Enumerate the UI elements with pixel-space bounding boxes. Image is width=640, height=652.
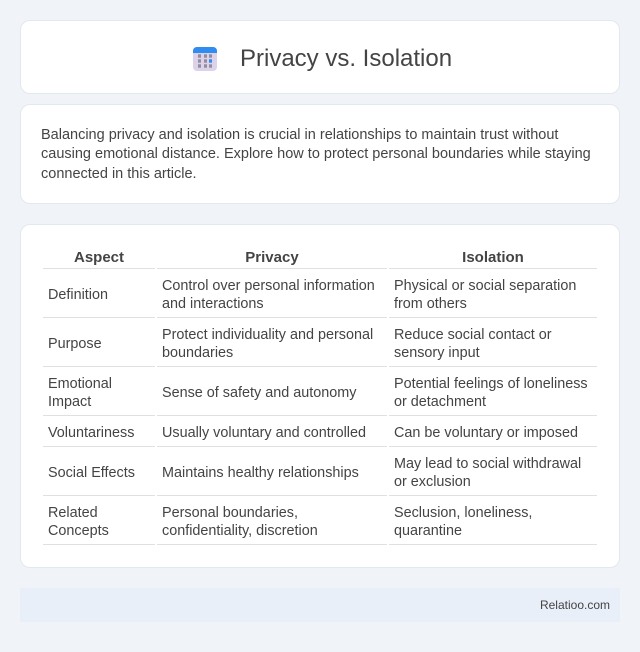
row: Emotional Impact <box>43 376 597 416</box>
row: Emotional Impact: or detachment <box>394 394 486 410</box>
intro text: causing emotional distance. Explore how to protect personal boundaries while staying <box>41 146 591 162</box>
row: Definition: Control over personal information <box>162 278 375 294</box>
row: Emotional Impact: Impact <box>48 394 91 410</box>
row: Definition <box>43 278 597 318</box>
panel: comparison table <box>20 224 620 568</box>
footer bar <box>20 588 620 622</box>
row: Social Effects <box>43 456 597 496</box>
row: Voluntariness: Can be voluntary or imposed <box>394 425 578 441</box>
icon: calendar <box>193 47 217 71</box>
panel: introduction <box>20 104 620 204</box>
row: Social Effects: May lead to social withdrawal <box>394 456 581 472</box>
row: Definition: and interactions <box>162 296 264 312</box>
row: Emotional Impact: Emotional <box>48 376 112 392</box>
row: Social Effects: Maintains healthy relationships <box>162 465 359 481</box>
row: Emotional Impact: Potential feelings of loneliness <box>394 376 588 392</box>
title: Privacy vs. Isolation <box>240 45 452 72</box>
row: Purpose: Reduce social contact or <box>394 327 552 343</box>
intro text: Balancing privacy and isolation is crucial in relationships to maintain trust without <box>41 126 558 142</box>
row: Social Effects: or exclusion <box>394 474 471 490</box>
row: Social Effects: Social Effects <box>48 465 135 481</box>
table header: Isolation <box>462 249 524 266</box>
row: Definition: Definition <box>48 287 108 303</box>
row: Voluntariness: Usually voluntary and controlled <box>162 425 366 441</box>
row: Related Concepts: Personal boundaries, <box>162 505 298 521</box>
row: Related Concepts: quarantine <box>394 523 462 539</box>
row: Definition: from others <box>394 296 467 312</box>
table header: Privacy <box>245 249 299 266</box>
table header: Aspect <box>74 249 124 266</box>
table <box>43 249 597 545</box>
row: Purpose: sensory input <box>394 345 480 361</box>
row: Related Concepts: Related <box>48 505 98 521</box>
row: Related Concepts: Concepts <box>48 523 109 539</box>
intro text: connected in this article. <box>41 166 197 182</box>
row: Related Concepts: Seclusion, loneliness, <box>394 505 532 521</box>
row: Purpose <box>43 327 597 367</box>
row: Voluntariness <box>43 425 597 447</box>
row: Purpose: Protect individuality and personal <box>162 327 373 343</box>
row: Voluntariness: Voluntariness <box>48 425 134 441</box>
table header <box>43 249 597 269</box>
intro text <box>41 126 591 182</box>
row: Related Concepts: confidentiality, discretion <box>162 523 318 539</box>
row: Emotional Impact: Sense of safety and autonomy <box>162 385 356 401</box>
row: Purpose: Purpose <box>48 336 102 352</box>
panel: title card <box>20 20 620 94</box>
row: Related Concepts <box>43 505 597 545</box>
row: Purpose: boundaries <box>162 345 233 361</box>
row: Definition: Physical or social separation <box>394 278 576 294</box>
footer text: Relatioo.com <box>540 598 610 612</box>
